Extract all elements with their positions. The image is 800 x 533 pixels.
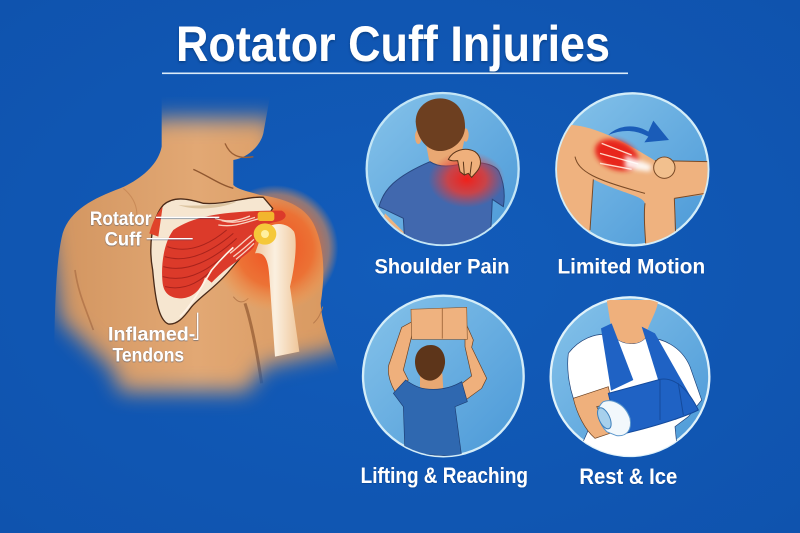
muscle fibres bbox=[163, 230, 237, 288]
title: Rotator Cuff Injuries bbox=[176, 16, 610, 72]
icon: limited motion bbox=[552, 93, 710, 247]
skin: back and shoulder bbox=[54, 97, 340, 420]
inflamed joint bbox=[254, 212, 276, 245]
rotator cuff label: Cuff bbox=[105, 230, 142, 251]
icon: shoulder pain bbox=[367, 93, 519, 250]
lower tendon edge bbox=[180, 247, 233, 317]
humerus bone bbox=[255, 224, 299, 357]
inflammation glow bbox=[212, 185, 338, 312]
inflamed tendons label bbox=[108, 313, 198, 367]
rotator cuff label bbox=[90, 209, 219, 251]
tendon highlights bbox=[215, 216, 260, 259]
title underline bbox=[162, 72, 628, 74]
panel: lifting and rest bbox=[361, 296, 709, 489]
inflamed tendons label: Tendons bbox=[112, 346, 184, 367]
inflamed tendons label: Inflamed- bbox=[108, 325, 195, 346]
label: limited motion: Limited Motion bbox=[557, 255, 705, 279]
icon: rest and ice bbox=[551, 297, 709, 460]
panel: shoulder pain and limited motion bbox=[367, 93, 710, 279]
rotator cuff muscle bbox=[162, 211, 286, 298]
icon: lifting and reaching bbox=[363, 296, 524, 457]
panel: shoulder anatomy bbox=[54, 97, 340, 420]
label: shoulder pain: Shoulder Pain bbox=[374, 255, 509, 279]
label: lifting and reaching: Lifting & Reaching bbox=[361, 463, 528, 488]
label: rest and ice: Rest & Ice bbox=[579, 464, 677, 489]
rotator cuff label: Rotator bbox=[90, 209, 152, 230]
scapula bbox=[151, 197, 273, 324]
